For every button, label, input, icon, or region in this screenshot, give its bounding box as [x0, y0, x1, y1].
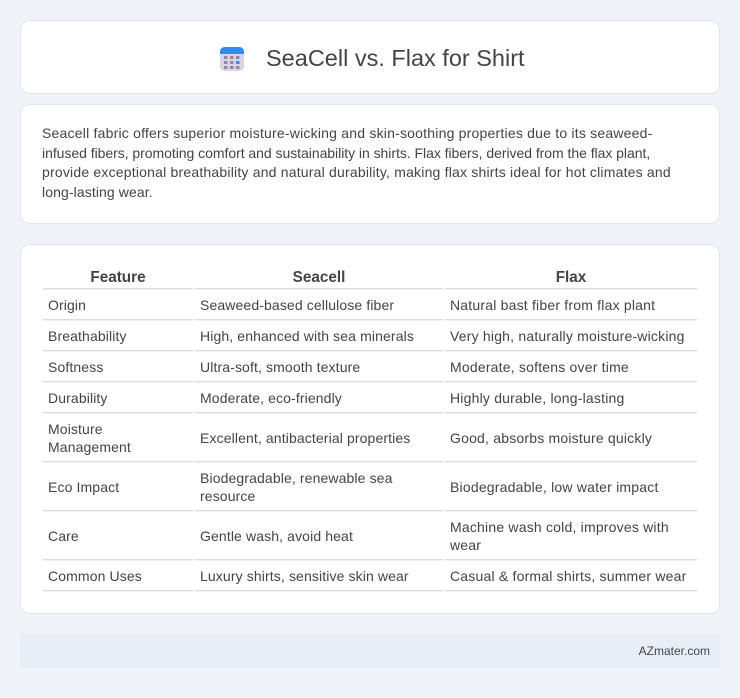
row: breathability: Breathability: [48, 328, 127, 344]
summary paragraph: infused fibers, promoting comfort and sustainability in shirts. Flax fibers, derived from the flax plant,: [42, 145, 650, 161]
row: common uses: Luxury shirts, sensitive skin wear: [200, 568, 409, 584]
row: moisture management: [43, 421, 697, 463]
row: durability: Moderate, eco-friendly: [200, 390, 342, 406]
row: common uses: [43, 568, 697, 592]
footer credit: AZmater.com: [639, 644, 710, 658]
table header row: [43, 269, 697, 592]
comparison table: [43, 269, 697, 592]
row: eco impact: Eco Impact: [48, 479, 119, 495]
row: softness: [43, 358, 697, 383]
summary paragraph: Seacell fabric offers superior moisture-wicking and skin-soothing properties due to its seaweed-: [42, 125, 653, 141]
row: eco impact: Biodegradable, renewable sea: [200, 470, 392, 486]
row: moisture management: Management: [48, 439, 131, 455]
row: breathability: [43, 328, 697, 352]
row: moisture management: Moisture: [48, 421, 103, 437]
row: breathability: Very high, naturally moisture-wicking: [450, 328, 685, 344]
row: durability: Highly durable, long-lasting: [450, 390, 624, 406]
row: softness: Ultra-soft, smooth texture: [200, 358, 360, 374]
panel: title header: [20, 20, 720, 94]
row: moisture management: Excellent, antibacterial properties: [200, 430, 410, 446]
panel: summary text: [20, 104, 720, 224]
row: origin: Origin: [48, 296, 86, 312]
row: softness: Softness: [48, 358, 103, 374]
row: care: Gentle wash, avoid heat: [200, 528, 353, 544]
summary paragraph: provide exceptional breathability and natural durability, making flax shirts ideal for hot climates and: [42, 164, 671, 180]
summary paragraph: long-lasting wear.: [42, 184, 153, 200]
panel: comparison table: [20, 244, 720, 614]
row: softness: Moderate, softens over time: [450, 358, 629, 374]
row: durability: [43, 390, 697, 414]
row: moisture management: Good, absorbs moisture quickly: [450, 430, 652, 446]
row: common uses: Casual & formal shirts, summer wear: [450, 568, 687, 584]
row: care: Care: [48, 528, 79, 544]
row: breathability: High, enhanced with sea minerals: [200, 328, 414, 344]
row: eco impact: resource: [200, 488, 255, 504]
icon: calendar: [220, 47, 244, 71]
row: origin: [43, 296, 697, 321]
title: SeaCell vs. Flax for Shirt: [266, 45, 525, 71]
summary paragraph: [42, 125, 671, 200]
table header row: Seacell: [293, 269, 345, 286]
row: eco impact: Biodegradable, low water impact: [450, 479, 659, 495]
row: origin: Natural bast fiber from flax plant: [450, 296, 655, 312]
table header row: Feature: [90, 269, 146, 286]
row: durability: Durability: [48, 390, 108, 406]
row: care: [43, 519, 697, 561]
row: care: Machine wash cold, improves with: [450, 519, 669, 535]
row: origin: Seaweed-based cellulose fiber: [200, 296, 394, 312]
row: eco impact: [43, 470, 697, 512]
table header row: Flax: [556, 269, 586, 286]
row: common uses: Common Uses: [48, 568, 142, 584]
row: care: wear: [450, 537, 481, 553]
footer bar: [20, 634, 720, 668]
